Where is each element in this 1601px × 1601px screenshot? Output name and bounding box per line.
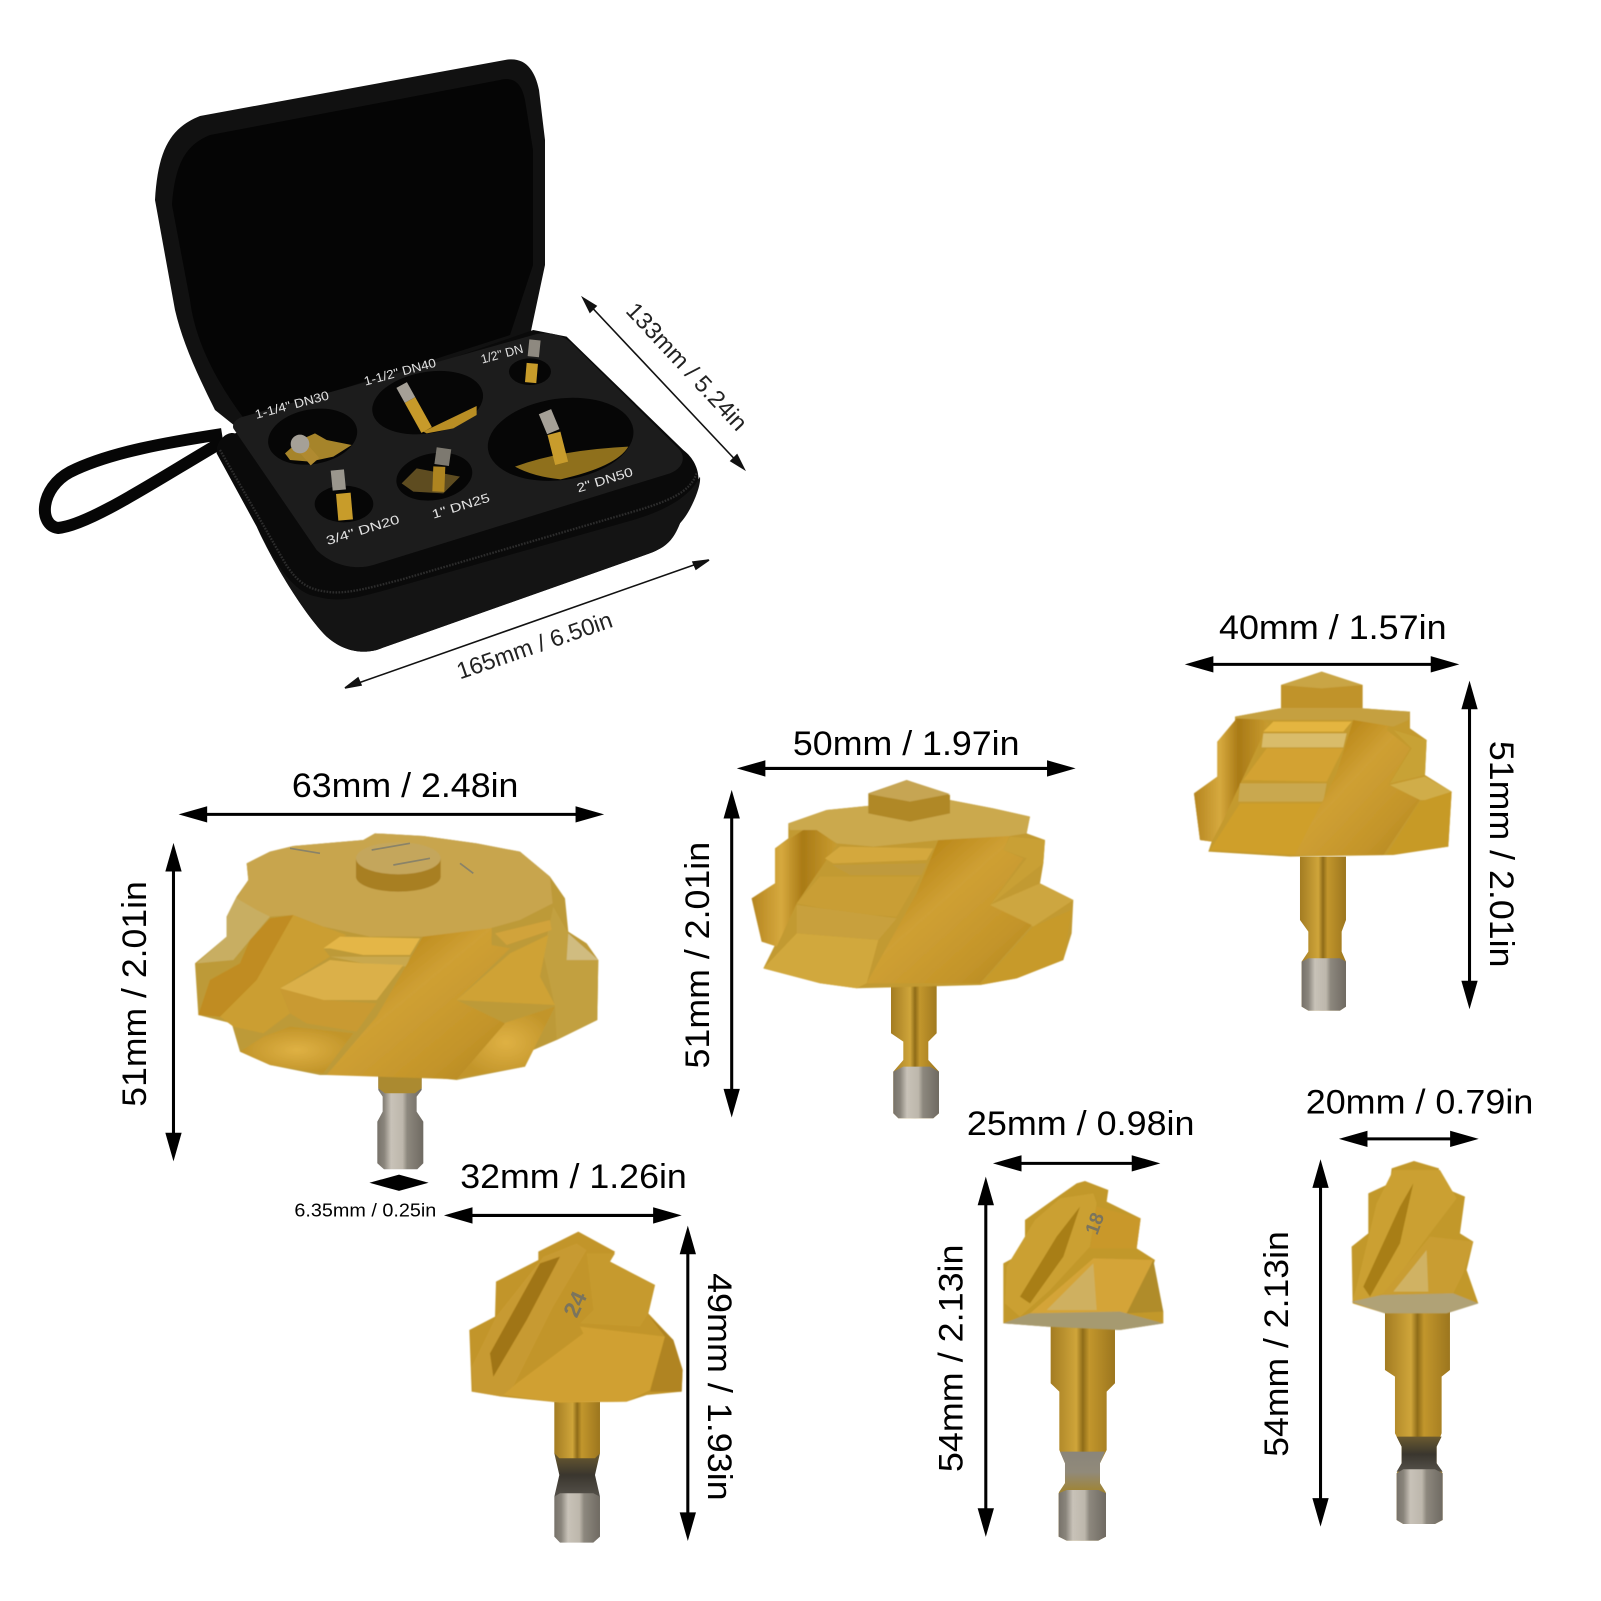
foam size labels: 1/2" DN	[479, 342, 525, 367]
25mm bit shank	[1051, 1320, 1115, 1541]
40mm bit shank	[1300, 857, 1346, 1011]
arrow: 49mm	[680, 1226, 696, 1541]
label: 54mm center: 54mm / 2.13in	[932, 1244, 970, 1472]
bit: 25mm	[1003, 1181, 1163, 1541]
case strap	[45, 434, 222, 528]
label: 51mm middle: 51mm / 2.01in	[679, 842, 717, 1068]
arrow: 51mm left	[165, 843, 182, 1161]
label: 49mm: 49mm / 1.93in	[700, 1273, 738, 1501]
label: 51mm right: 51mm / 2.01in	[1482, 741, 1520, 967]
arrow: 54mm center	[978, 1177, 994, 1537]
foam size labels	[253, 342, 635, 548]
dimension arrows and labels	[116, 609, 1533, 1541]
40mm bit body	[1194, 672, 1452, 857]
arrow: 50mm	[737, 760, 1076, 777]
label: 6.35mm: 6.35mm / 0.25in	[294, 1199, 436, 1220]
arrow: 63mm	[179, 806, 604, 823]
63mm bit shank	[377, 1073, 423, 1169]
label: 50mm: 50mm / 1.97in	[793, 725, 1019, 763]
case lid	[155, 59, 545, 430]
foam size labels: 1-1/4" DN30	[253, 389, 331, 422]
32mm bit shank	[554, 1402, 600, 1543]
bit: 63mm	[195, 833, 598, 1169]
label: case width: 165mm / 6.50in	[453, 607, 616, 684]
label: case depth: 133mm / 5.24in	[621, 297, 753, 436]
foam size labels: 1" DN25	[430, 491, 492, 522]
20mm bit shank	[1385, 1307, 1450, 1524]
arrow: 25mm	[993, 1155, 1160, 1172]
arrow: 6.35mm	[369, 1175, 429, 1191]
arrow: case width	[345, 560, 709, 688]
bit: 32mm	[469, 1232, 683, 1543]
foam holes with bits	[264, 340, 639, 522]
bit: 20mm	[1352, 1161, 1478, 1524]
25mm bit body	[1003, 1181, 1163, 1330]
foam size labels: 3/4" DN20	[324, 512, 401, 548]
63mm bit body	[195, 833, 598, 1080]
50mm bit shank	[891, 985, 939, 1118]
etched size mark 18: 18	[1082, 1210, 1109, 1238]
label: 54mm right: 54mm / 2.13in	[1258, 1231, 1296, 1457]
50mm bit body	[752, 780, 1073, 988]
bit: 50mm	[752, 780, 1073, 1118]
label: 25mm: 25mm / 0.98in	[967, 1105, 1194, 1143]
label: 63mm: 63mm / 2.48in	[292, 767, 518, 805]
label: 32mm: 32mm / 1.26in	[460, 1158, 687, 1196]
arrow: 20mm	[1339, 1131, 1479, 1147]
foam size labels: 2" DN50	[575, 465, 635, 495]
arrow: case depth	[583, 298, 744, 469]
foam size labels: 1-1/2" DN40	[362, 356, 438, 388]
20mm bit body	[1352, 1161, 1478, 1313]
arrow: 54mm right	[1312, 1159, 1329, 1527]
label: 40mm: 40mm / 1.57in	[1219, 609, 1447, 647]
etched size mark 24: 24	[558, 1287, 592, 1321]
arrow: 51mm right	[1461, 681, 1478, 1009]
tool wear marks	[290, 843, 473, 873]
arrow: 40mm	[1185, 656, 1459, 673]
label: 20mm: 20mm / 0.79in	[1306, 1083, 1533, 1121]
arrow: 32mm	[444, 1207, 682, 1224]
arrow: 51mm middle	[724, 790, 740, 1117]
32mm bit body	[469, 1232, 683, 1403]
storage case with bit set	[45, 59, 700, 652]
case base	[217, 330, 700, 652]
label: 51mm left: 51mm / 2.01in	[116, 881, 154, 1107]
bit: 40mm	[1194, 672, 1452, 1011]
